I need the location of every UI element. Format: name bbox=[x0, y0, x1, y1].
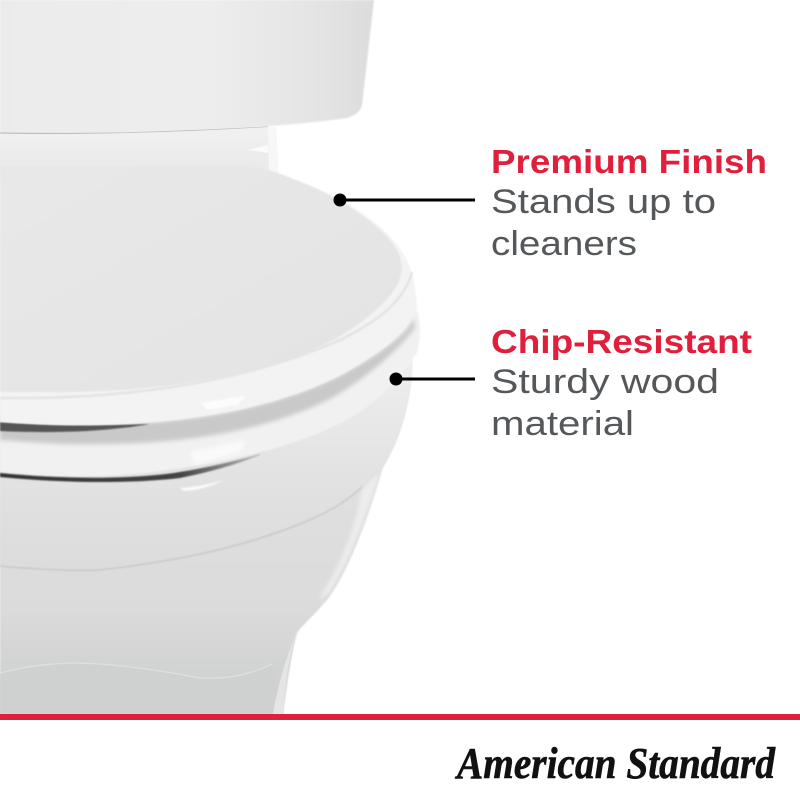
seat dark crease bbox=[0, 422, 150, 432]
callout: premium finish pointer bbox=[334, 194, 475, 206]
text block: chip-resistant bbox=[491, 323, 752, 443]
toilet photo illustration bbox=[0, 0, 420, 714]
lid glare bbox=[200, 396, 245, 410]
tank underside shadow line bbox=[0, 127, 268, 134]
seat shadow band bbox=[0, 318, 415, 444]
bowl glare bbox=[180, 480, 224, 491]
tank neck bbox=[0, 127, 279, 180]
lid outer rim bbox=[0, 165, 417, 425]
bowl rim band bbox=[0, 360, 412, 569]
rim band lower edge bbox=[0, 487, 362, 570]
red footer rule bbox=[0, 714, 800, 720]
text block: chip-resistant: Sturdy wood bbox=[491, 363, 719, 401]
seat ring bbox=[0, 310, 420, 477]
text block: premium finish: Premium Finish bbox=[491, 143, 767, 180]
lid edge groove bbox=[0, 272, 412, 398]
text block: chip-resistant: Chip-Resistant bbox=[491, 323, 752, 360]
text block: premium finish: cleaners bbox=[491, 225, 637, 263]
text block: chip-resistant: material bbox=[491, 405, 634, 443]
text block: premium finish bbox=[491, 143, 767, 263]
seat dark gap bbox=[0, 454, 260, 482]
seat glare bbox=[190, 440, 246, 465]
bowl highlight at right side bbox=[318, 470, 380, 600]
text block: premium finish: Stands up to bbox=[491, 183, 716, 221]
bowl base wave bbox=[0, 636, 295, 714]
callout: chip-resistant pointer bbox=[390, 372, 475, 386]
bowl body bbox=[0, 360, 412, 714]
tank bbox=[0, 0, 374, 134]
lid top surface bbox=[0, 165, 402, 392]
